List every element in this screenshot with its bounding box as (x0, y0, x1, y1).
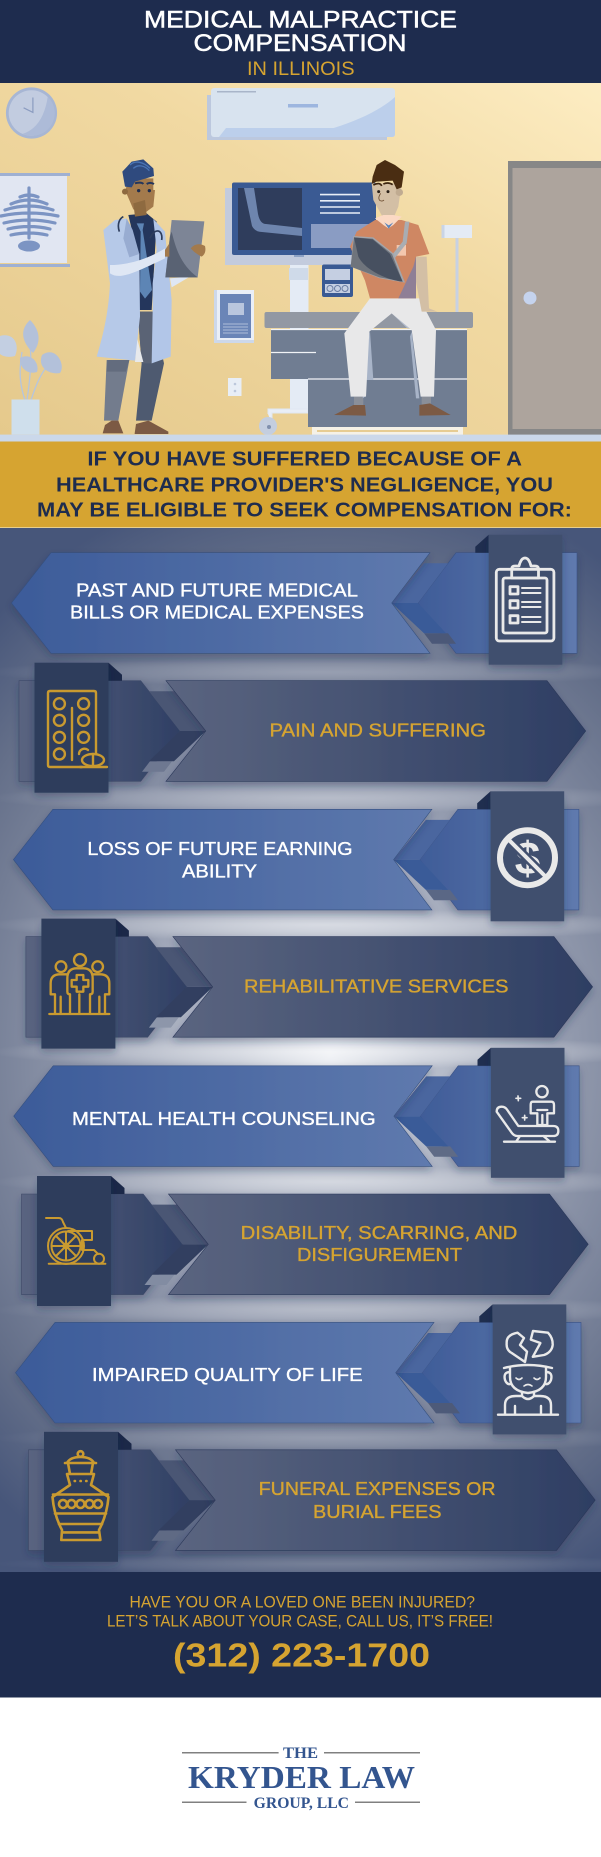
door (508, 161, 601, 435)
logo: The Kryder Law Group, LLC: GROUP, LLC (254, 1795, 349, 1812)
icon: wheelchair (46, 1218, 105, 1264)
title: COMPENSATION (194, 30, 406, 57)
call to action band (0, 1572, 601, 1698)
icon: wall clock (6, 87, 57, 139)
text: PAST AND FUTURE MEDICAL (76, 580, 358, 601)
monitor on stand (225, 182, 376, 435)
banner heading: IF YOU HAVE SUFFERED BECAUSE OF A (87, 448, 522, 471)
icon: therapy couch (497, 1086, 558, 1142)
text: PAIN AND SUFFERING (270, 720, 486, 741)
title (144, 6, 457, 57)
row 6: disability, scarring, and disfigurement (22, 1176, 588, 1306)
gold banner (0, 442, 601, 528)
text (259, 1478, 496, 1522)
text: REHABILITATIVE SERVICES (244, 976, 508, 996)
icon: pill blister pack (48, 691, 107, 767)
text: ABILITY (182, 861, 257, 882)
banner heading: HEALTHCARE PROVIDER'S NEGLIGENCE, YOU (56, 474, 553, 497)
banner heading: MAY BE ELIGIBLE TO SEEK COMPENSATION FOR: (37, 498, 572, 522)
wall outlet (228, 378, 242, 396)
floor (0, 435, 601, 442)
row 7: impaired quality of life (16, 1304, 581, 1434)
text: DISABILITY, SCARRING, AND (241, 1222, 517, 1243)
text (87, 838, 353, 882)
text: DISFIGUREMENT (297, 1244, 462, 1265)
control panel (322, 264, 353, 297)
header band (0, 0, 601, 83)
text (70, 580, 364, 623)
icon: family with cross (49, 954, 109, 1014)
examination bed (264, 312, 473, 435)
IV pole (442, 225, 472, 313)
row 8: funeral expenses (28, 1432, 595, 1562)
patient (334, 160, 451, 416)
logo: The Kryder Law Group, LLC: THE (283, 1745, 318, 1762)
icon: no money: $ (515, 832, 540, 884)
air conditioner (207, 88, 395, 140)
wall poster (214, 290, 254, 343)
panel: compensation list background (0, 528, 601, 1574)
banner heading (37, 448, 572, 522)
row 3: loss of future earning ability (13, 791, 579, 921)
row 4: rehabilitative services (26, 919, 593, 1049)
title: MEDICAL MALPRACTICE (144, 6, 457, 34)
text: BILLS OR MEDICAL EXPENSES (70, 602, 364, 623)
row 2: pain and suffering (19, 663, 586, 793)
doctor (97, 159, 205, 434)
row 5: mental health counseling (14, 1048, 579, 1178)
text: MENTAL HEALTH COUNSELING (72, 1108, 376, 1129)
icon: clipboard (496, 558, 554, 641)
illustration: clinic room (0, 83, 601, 442)
text: BURIAL FEES (313, 1501, 442, 1522)
text: FUNERAL EXPENSES OR (259, 1478, 496, 1499)
text: LOSS OF FUTURE EARNING (87, 838, 353, 859)
call to action text: LET’S TALK ABOUT YOUR CASE, CALL US, IT’S FREE! (107, 1613, 493, 1631)
icon: broken-headed person (498, 1331, 558, 1415)
row 1: medical bills (12, 535, 577, 665)
call to action text (107, 1594, 493, 1631)
skeleton x-ray poster (0, 173, 70, 267)
call to action text: HAVE YOU OR A LOVED ONE BEEN INJURED? (130, 1594, 475, 1612)
icon: urn (52, 1451, 108, 1540)
icon: no money (500, 830, 555, 885)
text (241, 1222, 517, 1265)
subtitle: IN ILLINOIS (247, 59, 354, 80)
logo: The Kryder Law Group, LLC: KRYDER LAW (188, 1759, 415, 1795)
potted plant (0, 320, 62, 434)
text: IMPAIRED QUALITY OF LIFE (92, 1364, 363, 1385)
logo: The Kryder Law Group, LLC (182, 1745, 420, 1812)
phone number: (312) 223-1700 (173, 1637, 430, 1674)
